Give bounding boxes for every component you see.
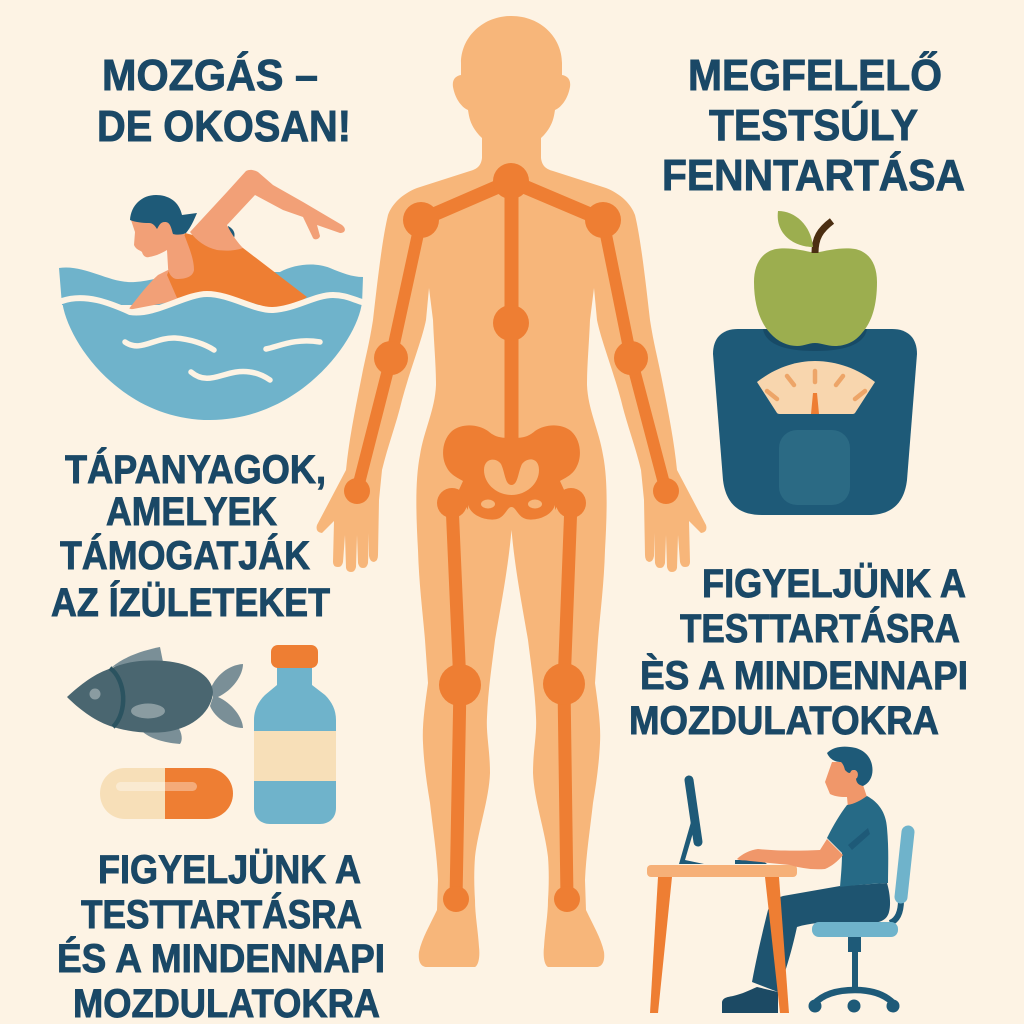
heading: posture (right): TESTTARTÁSRA: [680, 606, 960, 651]
icon: bottle: [254, 645, 336, 824]
heading: movement: DE OKOSAN!: [97, 102, 351, 151]
icon: capsule: [100, 768, 233, 819]
heading: healthy weight: MEGFELELŐ: [688, 50, 942, 100]
heading: nutrients: [51, 447, 330, 625]
icon: person at desk: [647, 747, 908, 1013]
icon: fish: [67, 647, 243, 744]
heading: movement: MOZGÁS –: [102, 50, 318, 100]
pelvis: [443, 425, 580, 520]
heading: posture (bottom left): [57, 847, 385, 1024]
heading: posture (right): ÈS A MINDENNAPI: [640, 653, 968, 698]
heading: nutrients: TÁPANYAGOK,: [65, 447, 326, 492]
heading: posture (right): MOZDULATOKRA: [629, 699, 939, 743]
heading: posture (bottom left): FIGYELJÜNK A: [98, 847, 361, 892]
heading: posture (bottom left): TESTTARTÁSRA: [81, 892, 362, 937]
icon: apple on scale: [713, 211, 917, 515]
heading: healthy weight: [662, 50, 965, 200]
heading: posture (bottom left): ÉS A MINDENNAPI: [57, 936, 385, 981]
body silhouette: [317, 16, 706, 967]
heading: movement: [97, 50, 351, 151]
heading: healthy weight: FENNTARTÁSA: [662, 150, 965, 200]
heading: nutrients: TÁMOGATJÁK: [60, 533, 310, 578]
icon: swimmer in water: [59, 170, 363, 420]
heading: nutrients: AMELYEK: [106, 490, 277, 534]
skeleton: [344, 163, 679, 912]
heading: posture (right): [629, 561, 968, 743]
heading: posture (right): FIGYELJÜNK A: [702, 561, 966, 606]
heading: healthy weight: TESTSÚLY: [709, 100, 918, 150]
heading: nutrients: AZ ÍZÜLETEKET: [51, 580, 330, 625]
